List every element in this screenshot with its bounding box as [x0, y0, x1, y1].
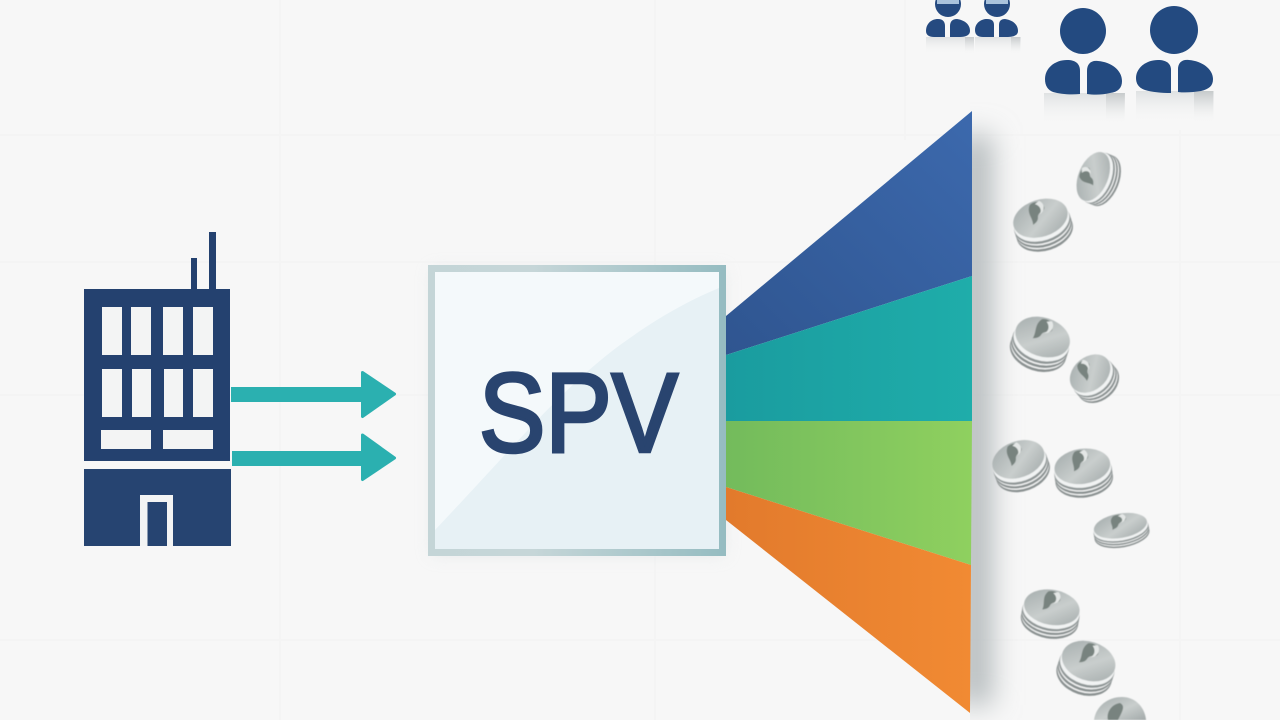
coin 6: [1051, 445, 1115, 501]
building upper block with windows: [84, 289, 230, 461]
tranche: green: [726, 421, 972, 565]
funnel shadow: [958, 135, 992, 705]
tranche: blue: [726, 111, 972, 355]
coin 1: [1070, 146, 1128, 211]
arrow: upper: [231, 372, 394, 416]
coin 2: [1007, 192, 1078, 259]
coin 3: [1004, 310, 1076, 379]
coin 5: [986, 433, 1056, 499]
chart: tranche funnel: [726, 111, 972, 713]
icon: small investors: [926, 0, 1021, 54]
coin 8: [1018, 585, 1083, 643]
coin 7: [1091, 509, 1152, 552]
coins: [986, 146, 1152, 720]
coin 9: [1051, 634, 1122, 703]
antennas: [191, 232, 216, 291]
tranche: orange: [726, 487, 971, 713]
coin 4: [1062, 346, 1127, 411]
coin 10: [1094, 697, 1146, 720]
tranche: teal: [726, 276, 972, 421]
panel: SPV box: [428, 265, 726, 556]
SPV label: SPV: [479, 350, 678, 476]
icon: investor two: [1136, 6, 1214, 123]
icon: investor one: [1044, 8, 1125, 125]
arrow: lower: [232, 435, 394, 480]
icon: office building: [84, 232, 231, 546]
building ground floor with door: [84, 469, 231, 546]
